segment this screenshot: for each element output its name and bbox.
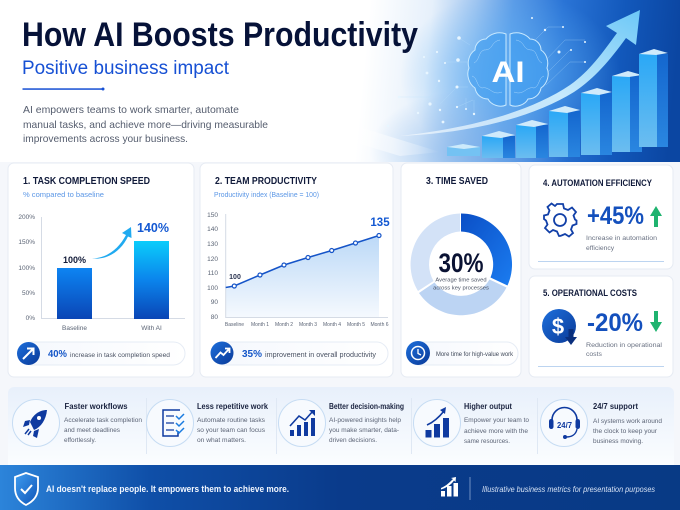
panel: task completion speed bbox=[8, 163, 194, 377]
callout: 35% bbox=[242, 349, 262, 360]
benefit: higher output: same resources. bbox=[464, 438, 510, 445]
donut chart: across key processes bbox=[433, 286, 489, 292]
icon: gear bbox=[544, 204, 576, 236]
panel: time saved bbox=[401, 163, 521, 377]
benefit: higher output: Higher output bbox=[464, 402, 512, 411]
disclaimer: Illustrative business metrics for presentation purposes bbox=[482, 485, 655, 494]
subtitle: Positive business impact bbox=[22, 58, 230, 79]
line chart: 150 bbox=[207, 212, 218, 219]
benefit: higher output bbox=[414, 400, 529, 446]
subheading: Productivity index (Baseline = 100) bbox=[214, 190, 319, 199]
heading: 2. TEAM PRODUCTIVITY bbox=[215, 176, 317, 187]
intro paragraph: improvements across your business. bbox=[23, 133, 188, 145]
benefit: faster workflows bbox=[12, 400, 142, 446]
line chart: 130 bbox=[207, 241, 218, 248]
benefit: better decision-making: driven decisions. bbox=[329, 437, 377, 444]
icon: dollar down bbox=[542, 309, 577, 345]
icon: up arrow bbox=[650, 206, 662, 227]
intro paragraph bbox=[23, 104, 268, 145]
line chart: 80 bbox=[211, 314, 218, 321]
description: Increase in automation bbox=[586, 235, 657, 242]
benefit: 24/7 support: AI systems work around bbox=[593, 418, 662, 425]
bar chart: With AI bbox=[141, 325, 162, 332]
description bbox=[586, 342, 663, 358]
benefit: faster workflows: Accelerate task completion bbox=[64, 417, 142, 424]
bar chart: 140% bbox=[137, 221, 169, 235]
benefit: 24/7 support: business moving. bbox=[593, 438, 643, 445]
bar chart bbox=[18, 214, 185, 332]
footer message: AI doesn't replace people. It empowers them to achieve more. bbox=[46, 484, 289, 495]
line chart: 140 bbox=[207, 226, 218, 233]
callout: 40% bbox=[48, 349, 67, 360]
benefit: better decision-making: you make smarter, data- bbox=[329, 427, 399, 434]
callout bbox=[210, 342, 388, 365]
heading: 1. TASK COMPLETION SPEED bbox=[23, 176, 150, 187]
panel: operational costs bbox=[529, 276, 673, 377]
benefit: faster workflows: effortlessly. bbox=[64, 437, 96, 444]
line chart: Month 4 bbox=[323, 322, 341, 328]
line chart: Month 3 bbox=[299, 322, 317, 328]
rising arrow bbox=[400, 10, 640, 136]
benefit: less repetitive work: Less repetitive work bbox=[197, 402, 269, 411]
icon: AI brain bbox=[468, 33, 548, 106]
title: How AI Boosts Productivity bbox=[22, 16, 418, 54]
benefit: faster workflows: and meet deadlines bbox=[64, 427, 121, 434]
hero banner bbox=[0, 0, 680, 162]
benefit: less repetitive work bbox=[146, 400, 269, 446]
line chart: Month 5 bbox=[347, 322, 365, 328]
line chart: Month 1 bbox=[251, 322, 269, 328]
stat: -20% bbox=[587, 309, 643, 337]
line chart: Month 2 bbox=[275, 322, 293, 328]
callout bbox=[17, 342, 185, 365]
benefit: higher output: achieve more with the bbox=[464, 428, 528, 435]
benefit: better decision-making bbox=[278, 400, 404, 446]
line chart: 135 bbox=[370, 217, 390, 229]
line chart bbox=[207, 212, 390, 328]
benefit: 24/7 support: the clock to keep your bbox=[593, 428, 658, 435]
icon: chart bbox=[441, 477, 458, 496]
benefit: 24/7 support: 24/7 support bbox=[593, 402, 638, 411]
bar chart: 200% bbox=[18, 214, 35, 221]
icon: dollar down: $ bbox=[552, 314, 564, 339]
description: costs bbox=[586, 351, 602, 358]
benefit: higher output: Empower your team to bbox=[464, 417, 529, 424]
donut chart: 30% bbox=[438, 248, 484, 278]
intro paragraph: manual tasks, and achieve more—driving measurable bbox=[23, 119, 268, 131]
benefit: 24/7 support bbox=[540, 400, 662, 446]
bar chart: 100% bbox=[63, 255, 86, 265]
benefit: less repetitive work: so your team can focus bbox=[197, 427, 266, 434]
arrow bbox=[92, 227, 132, 259]
panel: benefits bbox=[8, 387, 674, 465]
benefit: less repetitive work: on what matters. bbox=[197, 437, 246, 444]
callout bbox=[406, 341, 518, 365]
line chart: Baseline bbox=[225, 322, 244, 328]
line chart: 100 bbox=[207, 285, 218, 292]
intro paragraph: AI empowers teams to work smarter, automate bbox=[23, 104, 239, 116]
line chart: 90 bbox=[211, 299, 218, 306]
icon: shield bbox=[15, 473, 38, 505]
growth bars bbox=[447, 49, 668, 158]
icon: down arrow bbox=[650, 311, 662, 332]
AI label: AI bbox=[492, 56, 524, 89]
panel: team productivity bbox=[200, 163, 393, 377]
callout: improvement in overall productivity bbox=[265, 352, 377, 359]
benefit: 24/7 support: 24/7 bbox=[557, 421, 573, 430]
description: Reduction in operational bbox=[586, 342, 663, 349]
bar chart: Baseline bbox=[62, 325, 87, 332]
benefit: better decision-making: AI-powered insights help bbox=[329, 417, 401, 424]
bar chart: 50% bbox=[22, 290, 35, 297]
heading: 5. OPERATIONAL COSTS bbox=[543, 288, 637, 299]
donut chart: Average time saved bbox=[435, 278, 487, 284]
line chart: 120 bbox=[207, 256, 218, 263]
bar chart: 150% bbox=[18, 239, 35, 246]
line chart: 110 bbox=[208, 270, 218, 277]
benefit: faster workflows: Faster workflows bbox=[64, 402, 128, 411]
line chart: Month 6 bbox=[370, 322, 389, 328]
description: efficiency bbox=[586, 245, 615, 252]
callout: More time for high-value work bbox=[436, 351, 514, 358]
footer banner bbox=[0, 465, 680, 510]
line chart: 100 bbox=[229, 274, 241, 281]
heading: 3. TIME SAVED bbox=[426, 176, 488, 187]
subheading: % compared to baseline bbox=[23, 190, 104, 199]
callout: increase in task completion speed bbox=[70, 352, 170, 359]
benefit: better decision-making: Better decision-making bbox=[329, 402, 404, 411]
benefit: less repetitive work: Automate routine tasks bbox=[197, 417, 266, 424]
bar chart: 0% bbox=[26, 315, 35, 322]
panel: automation efficiency bbox=[529, 165, 673, 269]
heading: 4. AUTOMATION EFFICIENCY bbox=[543, 178, 652, 188]
circuit network bbox=[399, 27, 585, 114]
donut chart bbox=[411, 213, 512, 315]
accent rule bbox=[22, 88, 104, 90]
stat: +45% bbox=[587, 202, 644, 230]
bar chart: 100% bbox=[18, 265, 35, 272]
description bbox=[586, 235, 657, 252]
